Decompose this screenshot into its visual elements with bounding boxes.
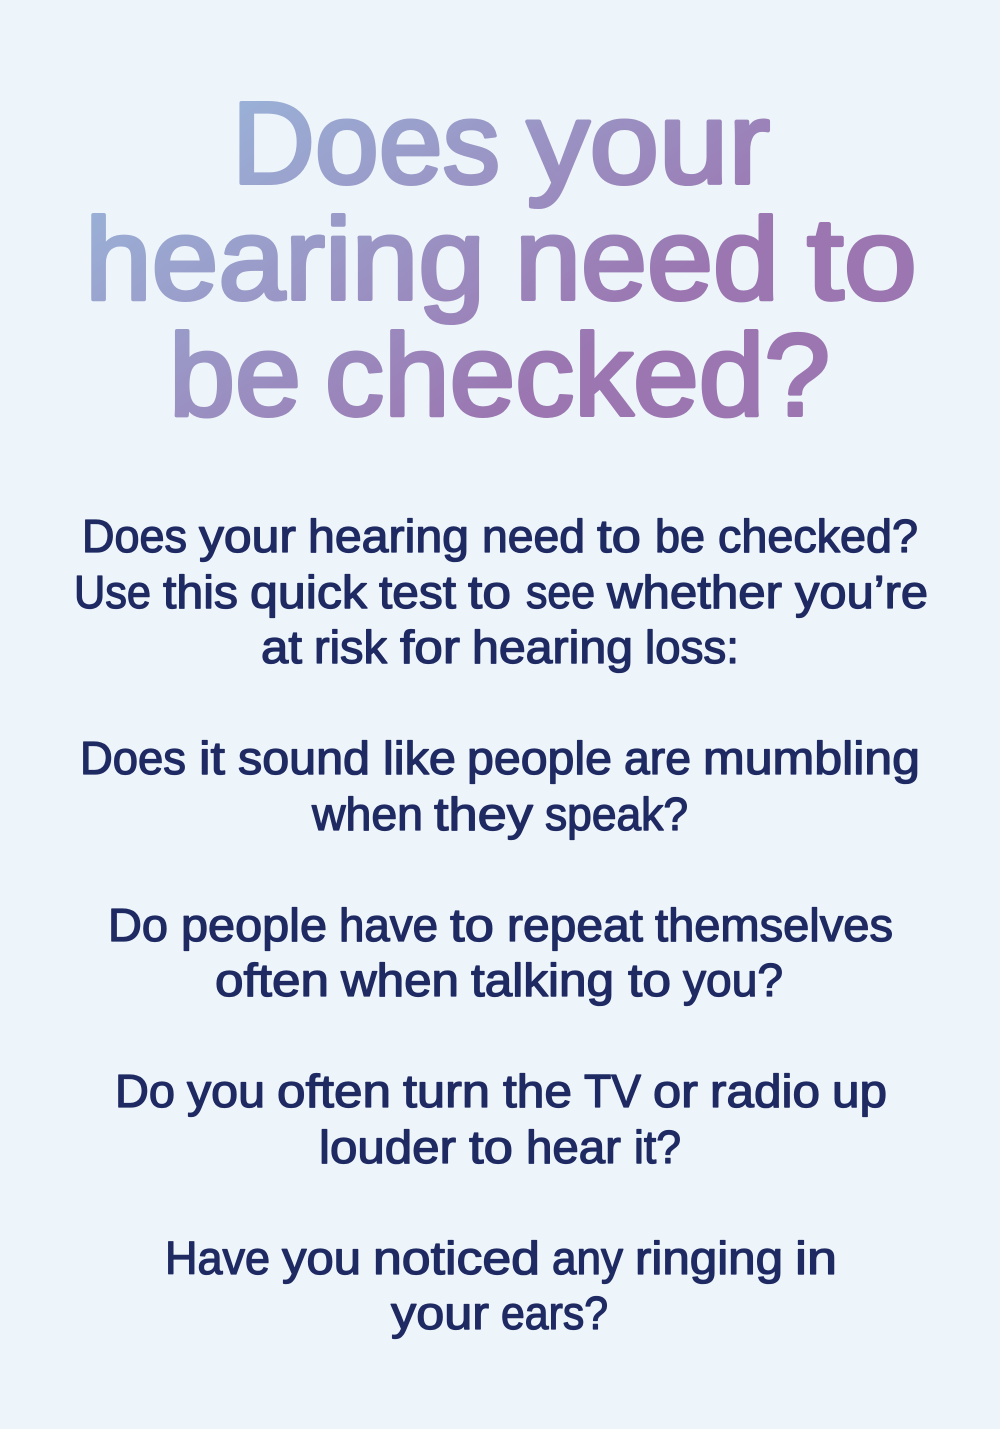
question: repeating: you? (683, 954, 783, 1006)
intro text block: checked? (718, 510, 918, 562)
question: ringing in ears: Have (165, 1232, 270, 1284)
question: TV or radio volume: hear (526, 1121, 621, 1173)
question: repeating: people (181, 899, 327, 951)
question: TV or radio volume: Do (115, 1065, 175, 1117)
intro text block: this (163, 566, 238, 618)
question: ringing in ears: you (282, 1232, 361, 1284)
question: repeating: to (450, 899, 494, 951)
question: TV or radio volume: turn (403, 1065, 490, 1117)
question: TV or radio volume (115, 1065, 887, 1173)
question: repeating: when (340, 954, 459, 1006)
question: ringing in ears (165, 1232, 837, 1339)
question: repeating: themselves (655, 899, 893, 951)
question: TV or radio volume: TV (584, 1065, 641, 1117)
question: repeating: often (215, 954, 329, 1006)
question: ringing in ears: noticed (373, 1232, 540, 1284)
title: hearing (85, 194, 485, 324)
question: TV or radio volume: you (187, 1065, 265, 1117)
question: mumbling: Does (80, 732, 186, 784)
question: mumbling: sound (238, 732, 370, 784)
intro text block: risk (314, 621, 388, 673)
title: your (527, 78, 770, 208)
intro text block: see (526, 566, 595, 618)
intro text block: hearing (308, 510, 469, 562)
question: mumbling: it (199, 732, 225, 784)
question: TV or radio volume: up (832, 1065, 887, 1117)
title (85, 78, 917, 440)
intro text block: your (199, 510, 296, 562)
intro text block: to (468, 566, 511, 618)
question: repeating: to (628, 954, 671, 1006)
intro text block: need (482, 510, 585, 562)
question: repeating (108, 899, 893, 1006)
question: TV or radio volume: to (469, 1121, 513, 1173)
question: TV or radio volume: louder (319, 1121, 456, 1173)
question: ringing in ears: in (795, 1232, 837, 1284)
intro text block: hearing (472, 621, 633, 673)
title: Does (232, 78, 500, 208)
question: TV or radio volume: the (503, 1065, 572, 1117)
question: mumbling: they (434, 788, 533, 840)
intro text block: quick (250, 566, 368, 618)
question: mumbling: like (383, 732, 456, 784)
question: ringing in ears: any (552, 1232, 623, 1284)
intro text block (74, 510, 928, 673)
title: be (169, 310, 301, 440)
intro text block: to (597, 510, 641, 562)
question: TV or radio volume: or (653, 1065, 698, 1117)
question: ringing in ears: ears? (501, 1287, 608, 1339)
question: mumbling: people (467, 732, 612, 784)
question: mumbling: mumbling (703, 732, 920, 784)
question: repeating: have (339, 899, 438, 951)
question: repeating: repeat (507, 899, 643, 951)
question: repeating: talking (471, 954, 614, 1006)
question: TV or radio volume: often (277, 1065, 391, 1117)
title: checked? (325, 310, 830, 440)
intro text block: Does (82, 510, 187, 562)
question: mumbling (80, 732, 920, 840)
question: ringing in ears: ringing (635, 1232, 783, 1284)
title: need (515, 194, 779, 324)
intro text block: test (379, 566, 456, 618)
title: to (807, 194, 917, 324)
question: TV or radio volume: radio (710, 1065, 820, 1117)
intro text block: loss: (645, 621, 739, 673)
intro text block: be (655, 510, 705, 562)
question: mumbling: are (624, 732, 691, 784)
question: ringing in ears: your (391, 1287, 489, 1339)
question: TV or radio volume: it? (634, 1121, 681, 1173)
intro text block: whether (606, 566, 782, 618)
intro text block: at (261, 621, 302, 673)
intro text block: Use (74, 566, 151, 618)
question: mumbling: when (311, 788, 423, 840)
question: mumbling: speak? (545, 788, 688, 840)
intro text block: you’re (795, 566, 928, 618)
question: repeating: Do (108, 899, 168, 951)
intro text block: for (400, 621, 460, 673)
